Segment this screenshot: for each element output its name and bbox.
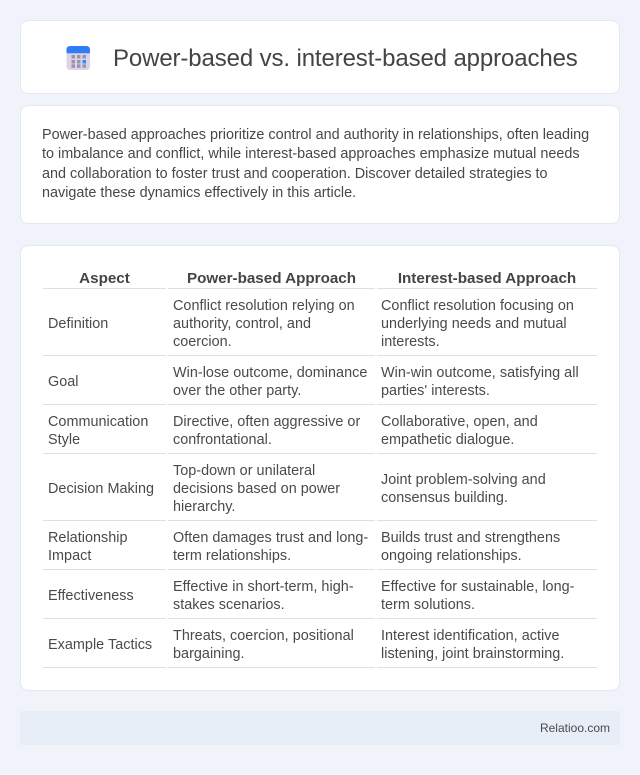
title: Power-based vs. interest-based approaches [113, 45, 578, 72]
icon: calendar [66, 46, 90, 70]
row: Example Tactics [43, 628, 597, 668]
row: Goal: parties' interests. [381, 383, 490, 399]
row: Goal: Goal [48, 374, 79, 390]
table header: Interest-based Approach [398, 270, 576, 286]
row: Decision Making: consensus building. [381, 490, 508, 506]
row: Example Tactics: Interest identification, active [381, 628, 560, 644]
row: Goal: Win-win outcome, satisfying all [381, 365, 579, 381]
row: Communication Style: Communication [48, 414, 148, 430]
row: Relationship Impact: Often damages trust and long- [173, 530, 368, 546]
row: Goal [43, 365, 597, 405]
row: Relationship Impact: term relationships. [173, 548, 291, 564]
row: Communication Style: Directive, often aggressive or [173, 414, 360, 430]
intro text: to imbalance and conflict, while interest-based approaches emphasize mutual needs [42, 146, 580, 162]
row: Example Tactics: listening, joint brainstorming. [381, 646, 564, 662]
row: Example Tactics: bargaining. [173, 646, 245, 662]
row: Decision Making: Joint problem-solving and [381, 472, 546, 488]
row: Definition: coercion. [173, 334, 232, 350]
row: Relationship Impact: Relationship [48, 530, 128, 546]
row: Definition: underlying needs and mutual [381, 316, 567, 332]
table card [20, 245, 620, 691]
row: Definition: authority, control, and [173, 316, 311, 332]
row: Definition: Conflict resolution relying on [173, 298, 355, 314]
row: Definition: Definition [48, 316, 108, 332]
intro text: Power-based approaches prioritize control and authority in relationships, often leading [42, 126, 589, 142]
table header: Aspect [79, 270, 130, 286]
row: Communication Style: Collaborative, open, and [381, 414, 538, 430]
intro text: and collaboration to foster trust and cooperation. Discover detailed strategies to [42, 166, 548, 182]
row: Communication Style: Style [48, 432, 80, 448]
row: Decision Making: decisions based on power [173, 481, 340, 497]
row: Communication Style: confrontational. [173, 432, 272, 448]
table header [43, 270, 597, 289]
row: Effectiveness: Effective in short-term, high- [173, 579, 354, 595]
header card [20, 20, 620, 94]
intro text: navigate these dynamics effectively in this article. [42, 185, 356, 201]
table header: Power-based Approach [187, 270, 356, 286]
row: Decision Making: Top-down or unilateral [173, 463, 315, 479]
row: Effectiveness [43, 579, 597, 619]
row: Example Tactics: Example Tactics [48, 637, 152, 653]
row: Relationship Impact: ongoing relationships. [381, 548, 522, 564]
row: Effectiveness: Effective for sustainable, long- [381, 579, 574, 595]
row: Decision Making: hierarchy. [173, 499, 235, 515]
row: Definition: Conflict resolution focusing on [381, 298, 574, 314]
row: Communication Style: empathetic dialogue. [381, 432, 514, 448]
intro text [42, 126, 589, 201]
row: Decision Making [43, 463, 597, 521]
row: Relationship Impact: Builds trust and strengthens [381, 530, 560, 546]
row: Effectiveness: term solutions. [381, 597, 475, 613]
row: Goal: over the other party. [173, 383, 301, 399]
footer credit: Relatioo.com [540, 721, 610, 735]
footer [20, 711, 620, 745]
row: Definition [43, 298, 597, 356]
row: Relationship Impact [43, 530, 597, 570]
row: Goal: Win-lose outcome, dominance [173, 365, 367, 381]
row: Communication Style [43, 414, 597, 454]
intro card [20, 105, 620, 224]
row: Decision Making: Decision Making [48, 481, 154, 497]
row: Definition: interests. [381, 334, 440, 350]
row: Effectiveness: stakes scenarios. [173, 597, 285, 613]
row: Relationship Impact: Impact [48, 548, 91, 564]
row: Example Tactics: Threats, coercion, positional [173, 628, 354, 644]
row: Effectiveness: Effectiveness [48, 588, 134, 604]
